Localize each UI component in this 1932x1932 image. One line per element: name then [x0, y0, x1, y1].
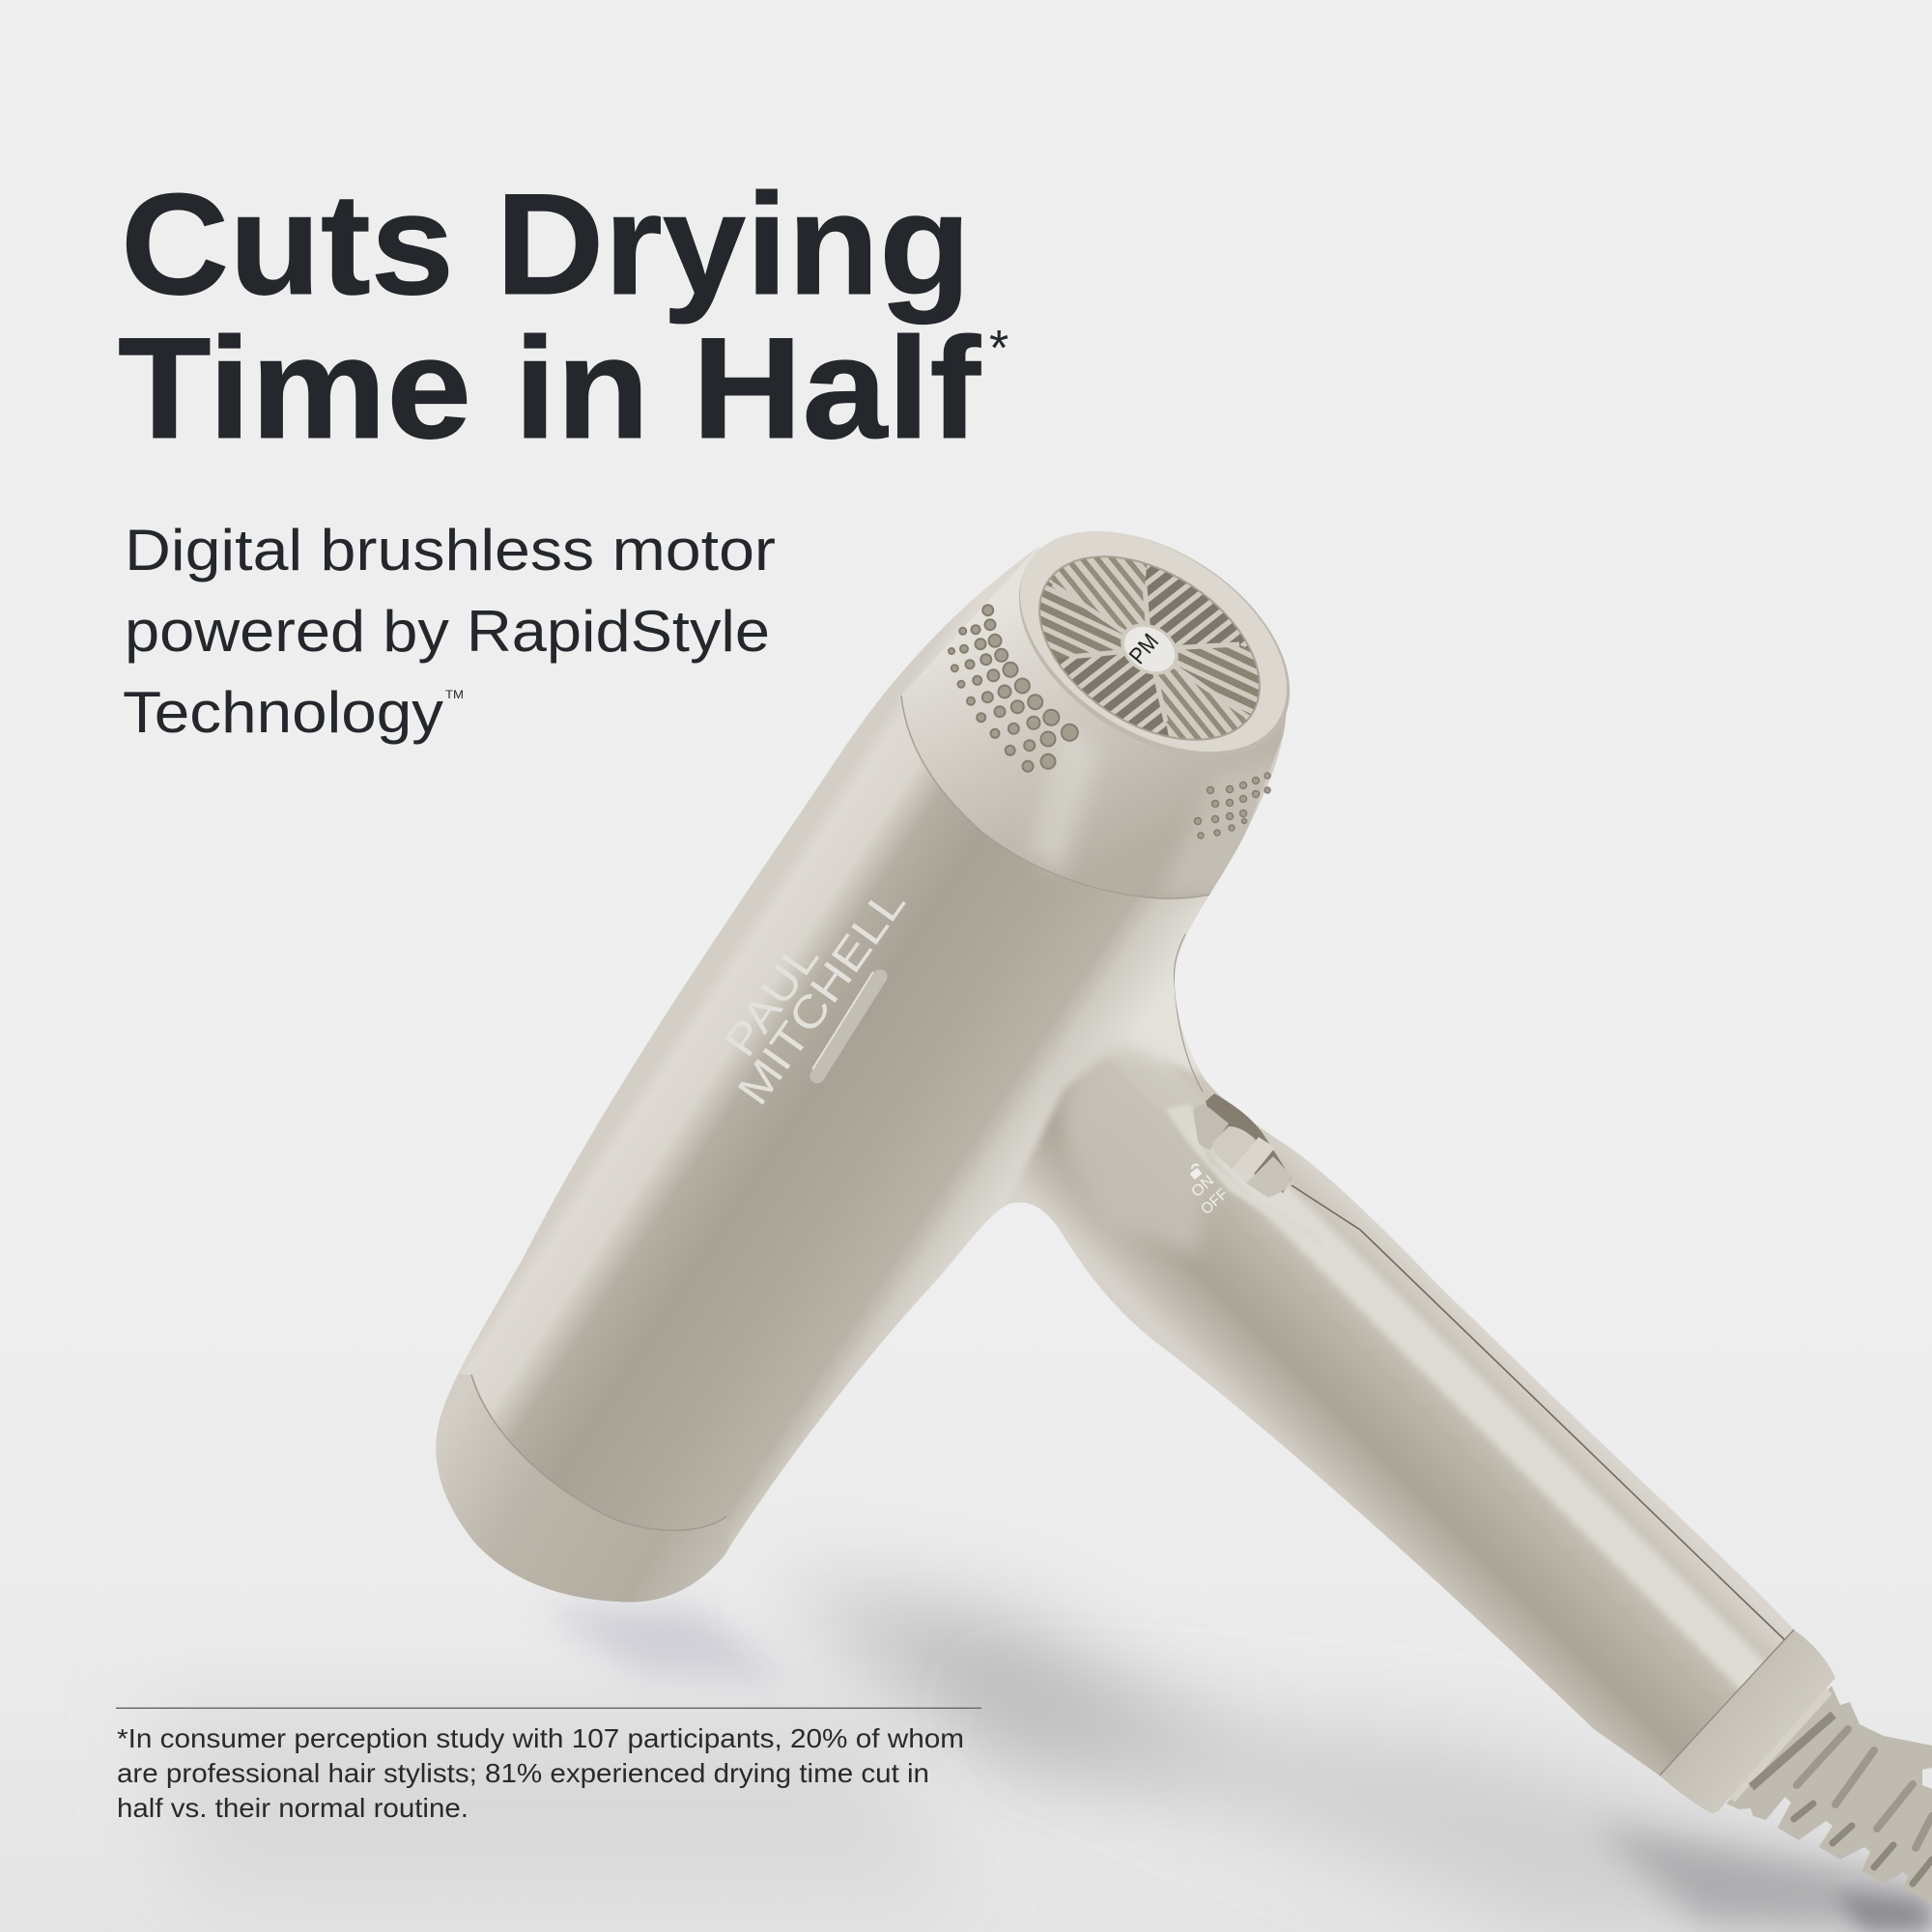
head seam	[901, 696, 1224, 898]
footnote	[117, 1723, 964, 1823]
headline: Time in Half	[118, 307, 980, 469]
headline: *	[989, 321, 1009, 377]
footnote: *In consumer perception study with 107 participants, 20% of whom	[117, 1723, 964, 1753]
subheading: powered by RapidStyle	[125, 599, 770, 664]
brand logo: MITCHELL	[727, 878, 915, 1114]
handle seam line	[1292, 1185, 1786, 1641]
barrel edge glow	[734, 1204, 1034, 1555]
center badge PM: PM	[1124, 629, 1164, 669]
grille	[1040, 557, 1259, 739]
vent holes left	[949, 605, 1078, 772]
subheading: Technology	[123, 680, 443, 745]
switch labels ON OFF	[1188, 1165, 1232, 1218]
head specular	[1030, 737, 1097, 871]
cord strain relief	[1726, 1686, 1932, 1903]
switch labels ON OFF: OFF	[1198, 1185, 1232, 1218]
headline: Cuts Drying	[121, 163, 971, 325]
footnote rule	[116, 1708, 981, 1709]
subheading	[123, 518, 776, 745]
head panel	[901, 541, 1294, 898]
back cap	[436, 1374, 728, 1602]
collar	[1660, 1630, 1835, 1813]
hair dryer body	[415, 541, 1835, 1826]
cast shadow	[145, 1584, 1932, 1932]
center badge PM	[1111, 612, 1188, 686]
footnote: are professional hair stylists; 81% experienced drying time cut in	[117, 1758, 929, 1788]
brand logo: PAUL	[715, 933, 828, 1065]
vent holes right	[1194, 773, 1270, 838]
slider button	[812, 972, 880, 1076]
switch labels ON OFF: ON	[1188, 1173, 1217, 1201]
neck seam line	[1174, 934, 1203, 1092]
back cap seam	[471, 1375, 726, 1530]
subheading: Digital brushless motor	[125, 518, 776, 582]
handle shading	[1009, 1042, 1793, 1776]
footnote: half vs. their normal routine.	[117, 1793, 469, 1823]
subheading: TM	[445, 688, 464, 701]
headline	[118, 163, 1009, 469]
power switch	[1166, 1094, 1323, 1248]
nozzle rim	[979, 485, 1330, 804]
